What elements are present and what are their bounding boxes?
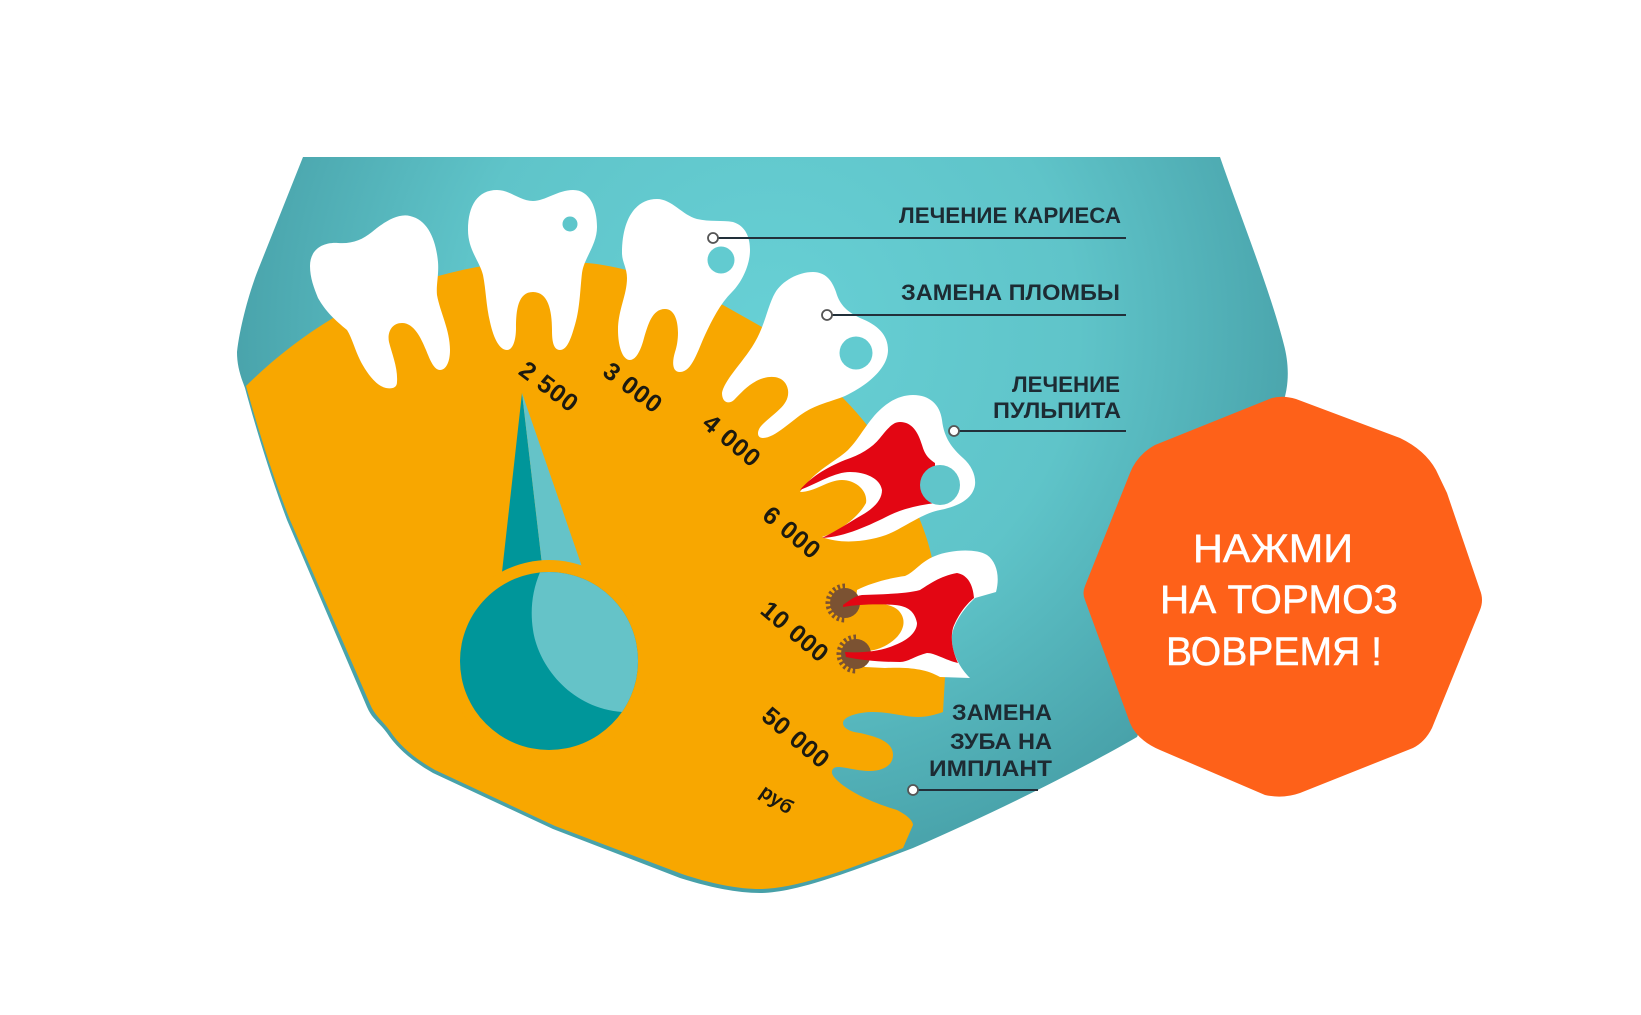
label: implant replacement: ЗАМЕНА — [952, 700, 1052, 725]
leader line: filling — [822, 310, 1126, 320]
callout: orange brake sign — [1084, 397, 1482, 797]
label: pulpitis treatment: ЛЕЧЕНИЕ — [1012, 372, 1120, 397]
callout text: НА ТОРМОЗ — [1160, 578, 1398, 622]
label: implant replacement — [929, 700, 1053, 781]
price: 4 000: 4 000 — [697, 409, 766, 473]
gauge needle — [500, 393, 590, 590]
price: 50 000: 50 000 — [756, 702, 835, 774]
callout text: НАЖМИ — [1193, 527, 1353, 571]
icon: tooth with periodontitis — [828, 551, 998, 678]
label: pulpitis treatment: ПУЛЬПИТА — [993, 398, 1121, 423]
price: 6 000: 6 000 — [757, 501, 826, 565]
icon: healthy tooth — [310, 215, 450, 388]
label: implant replacement: ЗУБА НА — [950, 729, 1052, 754]
panel: orange gum dial — [246, 262, 945, 889]
icon: tooth with caries — [618, 199, 750, 372]
icon: tooth with small caries — [468, 190, 597, 350]
callout text: ВОВРЕМЯ ! — [1166, 630, 1382, 674]
leader line: implant — [908, 785, 1038, 795]
icon: tooth with filling — [722, 272, 888, 438]
label: caries treatment: ЛЕЧЕНИЕ КАРИЕСА — [899, 203, 1121, 228]
label: filling replacement: ЗАМЕНА ПЛОМБЫ — [901, 280, 1120, 305]
label: pulpitis treatment — [993, 372, 1121, 423]
panel: teal gauge background — [237, 157, 1288, 893]
price: 10 000: 10 000 — [755, 596, 834, 668]
icon: tooth with pulpitis — [800, 395, 975, 541]
leader line: caries — [708, 233, 1126, 243]
currency label: руб — [756, 781, 797, 819]
gauge dial — [460, 560, 638, 750]
callout text — [1160, 527, 1398, 674]
price: 2 500: 2 500 — [514, 356, 583, 418]
label: implant replacement: ИМПЛАНТ — [929, 756, 1053, 781]
leader line: pulpitis — [949, 426, 1126, 436]
price: 3 000: 3 000 — [598, 357, 667, 419]
